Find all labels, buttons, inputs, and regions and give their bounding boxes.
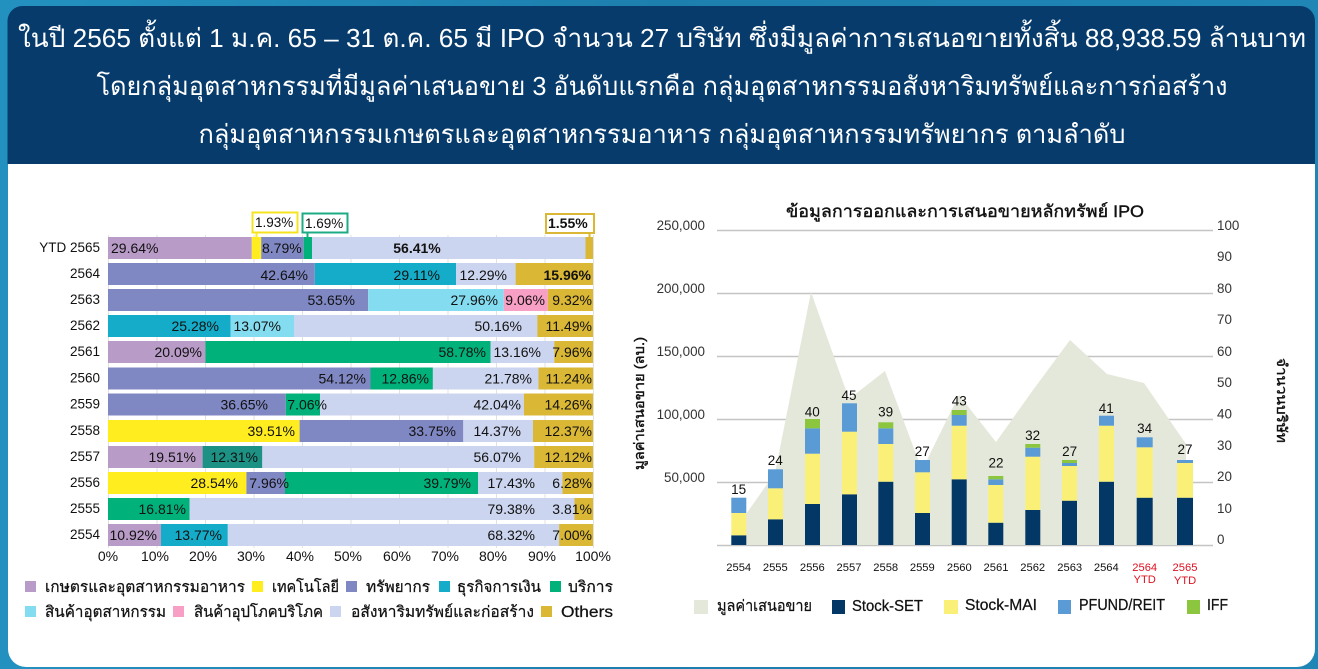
bar row: 2564: 42.64% — [261, 267, 308, 283]
right axis: number of companies: 20 — [1217, 469, 1232, 484]
data labels: number of companies: 43 — [952, 394, 967, 409]
legend: industry groups: สินค้าอุตสาหกรรม — [45, 604, 166, 622]
bar row: 2563: 53.65% — [308, 292, 355, 308]
x axis: percentage scale: 60% — [383, 548, 411, 564]
category axis: years: 2554 — [726, 562, 751, 574]
bar row: 2558: 33.75% — [409, 423, 456, 439]
left axis: offering value: 50,000 — [664, 470, 705, 485]
data labels: number of companies: 15 — [731, 482, 746, 497]
bar row: 2555: 3.81% — [552, 501, 592, 517]
legend: securities types: Stock-SET — [852, 598, 924, 615]
left axis: offering value — [657, 218, 705, 485]
bar row: 2564: 29.11% — [394, 267, 440, 283]
bar row: 2555: 2555 — [70, 501, 100, 516]
bar row: YTD 2565: 8.79% — [262, 240, 302, 256]
category axis: years: YTD — [1134, 574, 1156, 586]
bar row: 2556: 17.43% — [488, 475, 535, 491]
chart title: ข้อมูลการออกและการเสนอขายหลักทรัพย์ IPO — [786, 202, 1144, 222]
bar row: 2559: 42.04% — [474, 396, 521, 412]
bar row: 2560: 12.86% — [382, 370, 429, 386]
bar row: 2561: 20.09% — [155, 344, 202, 360]
bar row: 2562: 11.49% — [546, 318, 592, 334]
bar row: 2560: 2560 — [70, 370, 100, 386]
data labels: number of companies: 24 — [768, 453, 783, 468]
data labels: number of companies: 45 — [841, 388, 857, 403]
data labels: number of companies: 40 — [805, 405, 820, 420]
bar row: 2557: 2557 — [70, 449, 100, 464]
bar row: 2555: 79.38% — [488, 501, 535, 517]
bar row: 2557: 12.12% — [545, 449, 592, 465]
right axis: number of companies: 80 — [1217, 281, 1232, 296]
left axis: offering value: 250,000 — [657, 218, 705, 233]
bar row: 2556: 2556 — [70, 475, 100, 490]
bar row: 2562: 13.07% — [234, 318, 281, 334]
bar row: 2560: 11.24% — [546, 370, 592, 386]
bar row: 2564: 15.96% — [544, 267, 592, 283]
legend: securities types: มูลค่าเสนอขาย — [717, 598, 812, 616]
stacked bars: securities type by year — [731, 403, 1193, 545]
callout: technology 1.93% — [252, 212, 298, 238]
bar row: 2559: 14.26% — [545, 396, 592, 412]
data labels: number of companies: 27 — [915, 444, 930, 459]
bar row: YTD 2565: 29.64% — [111, 240, 158, 256]
data labels: number of companies: 34 — [1137, 421, 1153, 436]
bar row: 2561: 7.96% — [552, 344, 592, 360]
panel: header banner — [8, 6, 1315, 164]
x axis: percentage scale: 90% — [528, 548, 556, 564]
category axis: years: 2564 — [1094, 562, 1119, 574]
x axis: percentage scale: 10% — [141, 548, 169, 564]
category axis: years: 2559 — [910, 562, 935, 574]
bar row: 2556: 7.96% — [249, 475, 289, 491]
category axis: years: 2561 — [984, 562, 1008, 574]
bar row: 2558: 2558 — [70, 423, 100, 438]
bar row: 2562: 50.16% — [475, 318, 522, 334]
right axis: number of companies: 90 — [1217, 249, 1232, 264]
legend: industry groups: บริการ — [568, 579, 613, 596]
category axis: years: 2563 — [1057, 562, 1082, 574]
panel: white content card — [8, 150, 1315, 667]
bar row: 2564: 12.29% — [460, 267, 507, 283]
right axis: number of companies: 100 — [1217, 218, 1239, 233]
legend: industry groups: สินค้าอุปโภคบริโภค — [194, 603, 323, 622]
legend: industry groups: อสังหาริมทรัพย์และก่อสร้าง — [351, 603, 534, 621]
category axis: years: 2556 — [800, 562, 825, 574]
bar row: 2559: 7.06% — [287, 396, 327, 412]
data labels: number of companies — [731, 388, 1193, 497]
bar row: YTD 2565: YTD 2565 — [39, 240, 100, 255]
bar row: 2561 — [70, 341, 593, 363]
bar row: 2563: 27.96% — [451, 292, 498, 308]
bar row: 2557 — [70, 446, 593, 468]
right axis: number of companies: 40 — [1217, 406, 1232, 422]
bar row: 2554 — [70, 524, 593, 546]
category axis: years: 2555 — [763, 562, 788, 574]
category axis: years: YTD — [1174, 575, 1196, 587]
bar row: 2560 — [70, 368, 593, 390]
category axis: years: 2558 — [873, 562, 898, 574]
x axis: percentage scale: 50% — [334, 548, 362, 564]
bar row: 2554: 68.32% — [488, 527, 535, 543]
bar row: 2557: 12.31% — [211, 449, 258, 465]
bar row: 2559: 36.65% — [221, 396, 268, 412]
bar row: 2561: 58.78% — [439, 344, 486, 360]
bar row: 2556 — [70, 472, 593, 494]
right axis: number of companies: 50 — [1217, 375, 1232, 390]
callout: others 1.55%: 1.55% — [548, 215, 588, 231]
panel: header banner: โดยกลุ่มอุตสาหกรรมที่มีมูลค่าเสนอขาย 3 อันดับแรกคือ กลุ่มอุตสาหกรรมอสังหาริมทรัพย์และการก่อสร้าง — [96, 68, 1228, 102]
x axis: percentage scale: 20% — [189, 548, 217, 564]
bar row: 2563: 9.06% — [505, 292, 545, 308]
bar row: 2563 — [70, 289, 593, 311]
bar row: 2561: 2561 — [70, 344, 100, 359]
bar row: YTD 2565: 56.41% — [393, 240, 441, 256]
left axis: offering value: 150,000 — [657, 344, 705, 359]
right axis title: จำนวนบริษัท — [1274, 358, 1290, 443]
x axis: percentage scale: 80% — [479, 548, 507, 564]
legend: industry groups: เทคโนโลยี — [272, 578, 339, 596]
bar row: 2556: 28.54% — [191, 475, 238, 491]
x axis: percentage scale: 100% — [575, 548, 611, 564]
right axis: number of companies: 10 — [1217, 501, 1232, 516]
callout: services 1.69% — [302, 214, 348, 238]
data labels: number of companies: 39 — [878, 405, 893, 420]
left axis: offering value: 100,000 — [657, 407, 705, 422]
right axis: number of companies: 70 — [1217, 312, 1232, 327]
bar row: 2559: 2559 — [70, 396, 100, 412]
legend: industry groups: ธุรกิจการเงิน — [457, 579, 541, 597]
bar row: 2558: 14.37% — [474, 423, 521, 439]
legend: securities types — [694, 597, 1228, 616]
left axis: offering value: 200,000 — [657, 281, 705, 296]
bar row: 2554: 10.92% — [110, 527, 157, 543]
category axis: years: 2562 — [1020, 562, 1045, 574]
category axis: years: 2557 — [837, 562, 861, 574]
left axis title: มูลค่าเสนอขาย (ลบ.) — [631, 337, 648, 470]
bar row: YTD 2565 — [39, 237, 593, 259]
bar row: 2555 — [70, 498, 593, 520]
bar row: 2559 — [70, 394, 593, 416]
right axis: number of companies: 30 — [1217, 438, 1232, 453]
bar row: 2560: 54.12% — [319, 370, 366, 386]
bar row: 2554: 7.00% — [552, 527, 592, 543]
legend: securities types: IFF — [1207, 597, 1228, 614]
bar row: 2555: 16.81% — [139, 501, 186, 517]
legend: securities types: Stock-MAI — [965, 597, 1037, 614]
bar row: 2561: 13.16% — [494, 344, 541, 360]
bar row: 2560: 21.78% — [485, 370, 532, 386]
bar row: 2562: 2562 — [70, 318, 100, 333]
x axis: percentage scale: 30% — [237, 548, 265, 564]
data labels: number of companies: 27 — [1177, 442, 1193, 457]
x axis: percentage scale: 0% — [98, 548, 118, 564]
bar row: 2557: 56.07% — [474, 449, 521, 465]
chart: IPO issuance value and number of companies — [717, 230, 1213, 546]
category axis: years: 2565 — [1173, 562, 1197, 574]
bar row: 2554: 2554 — [70, 527, 100, 542]
bar row: 2558: 39.51% — [248, 423, 295, 439]
bar row: 2563: 2563 — [70, 292, 100, 307]
bar row: 2558 — [70, 420, 593, 442]
category axis: years: 2560 — [947, 562, 972, 574]
bar row: 2564 — [70, 263, 593, 285]
area: offering value — [739, 292, 1186, 545]
bar row: 2557: 19.51% — [149, 449, 196, 465]
bar row: 2556: 39.79% — [424, 475, 471, 491]
category axis: years — [726, 562, 1197, 587]
callout: services 1.69%: 1.69% — [305, 216, 343, 231]
x axis: percentage scale: 40% — [286, 548, 314, 564]
bar row: 2558: 12.37% — [545, 423, 592, 439]
callout: others 1.55% — [546, 214, 594, 238]
right axis: number of companies: 60 — [1217, 344, 1232, 359]
data labels: number of companies: 22 — [988, 456, 1004, 471]
callout: technology 1.93%: 1.93% — [255, 215, 293, 230]
data labels: number of companies: 41 — [1099, 401, 1114, 416]
x axis: percentage scale — [98, 548, 611, 564]
right axis: number of companies: 0 — [1217, 532, 1224, 547]
bar row: 2556: 6.28% — [552, 475, 592, 491]
legend: securities types: PFUND/REIT — [1079, 597, 1165, 614]
chart: stacked bars of IPO value share by industry — [39, 235, 594, 548]
data labels: number of companies: 32 — [1025, 428, 1040, 443]
bar row: 2564: 2564 — [70, 266, 100, 281]
bar row: 2554: 13.77% — [175, 527, 222, 543]
legend: industry groups: ทรัพยากร — [366, 579, 430, 596]
legend: industry groups — [25, 578, 613, 622]
bar row: 2562 — [70, 315, 593, 337]
panel: header banner: ในปี 2565 ตั้งแต่ 1 ม.ค. 65 – 31 ต.ค. 65 มี IPO จำนวน 27 บริษัท ซึ่งมีมูลค่าการเสนอขายทั้งสิ้น 88,938.59 ล้านบาท — [18, 19, 1306, 54]
data labels: number of companies: 27 — [1062, 444, 1077, 459]
bar row: 2563: 9.32% — [552, 292, 592, 308]
legend: industry groups: เกษตรและอุตสาหกรรมอาหาร — [45, 579, 245, 597]
panel: header banner: กลุ่มอุตสาหกรรมเกษตรและอุตสาหกรรมอาหาร กลุ่มอุตสาหกรรมทรัพยากร ตามลำดับ — [198, 119, 1126, 150]
x axis: percentage scale: 70% — [431, 548, 459, 564]
right axis: number of companies — [1217, 218, 1239, 547]
bar row: 2562: 25.28% — [172, 318, 219, 334]
legend: industry groups: Others — [561, 604, 613, 621]
category axis: years: 2564 — [1132, 562, 1157, 574]
